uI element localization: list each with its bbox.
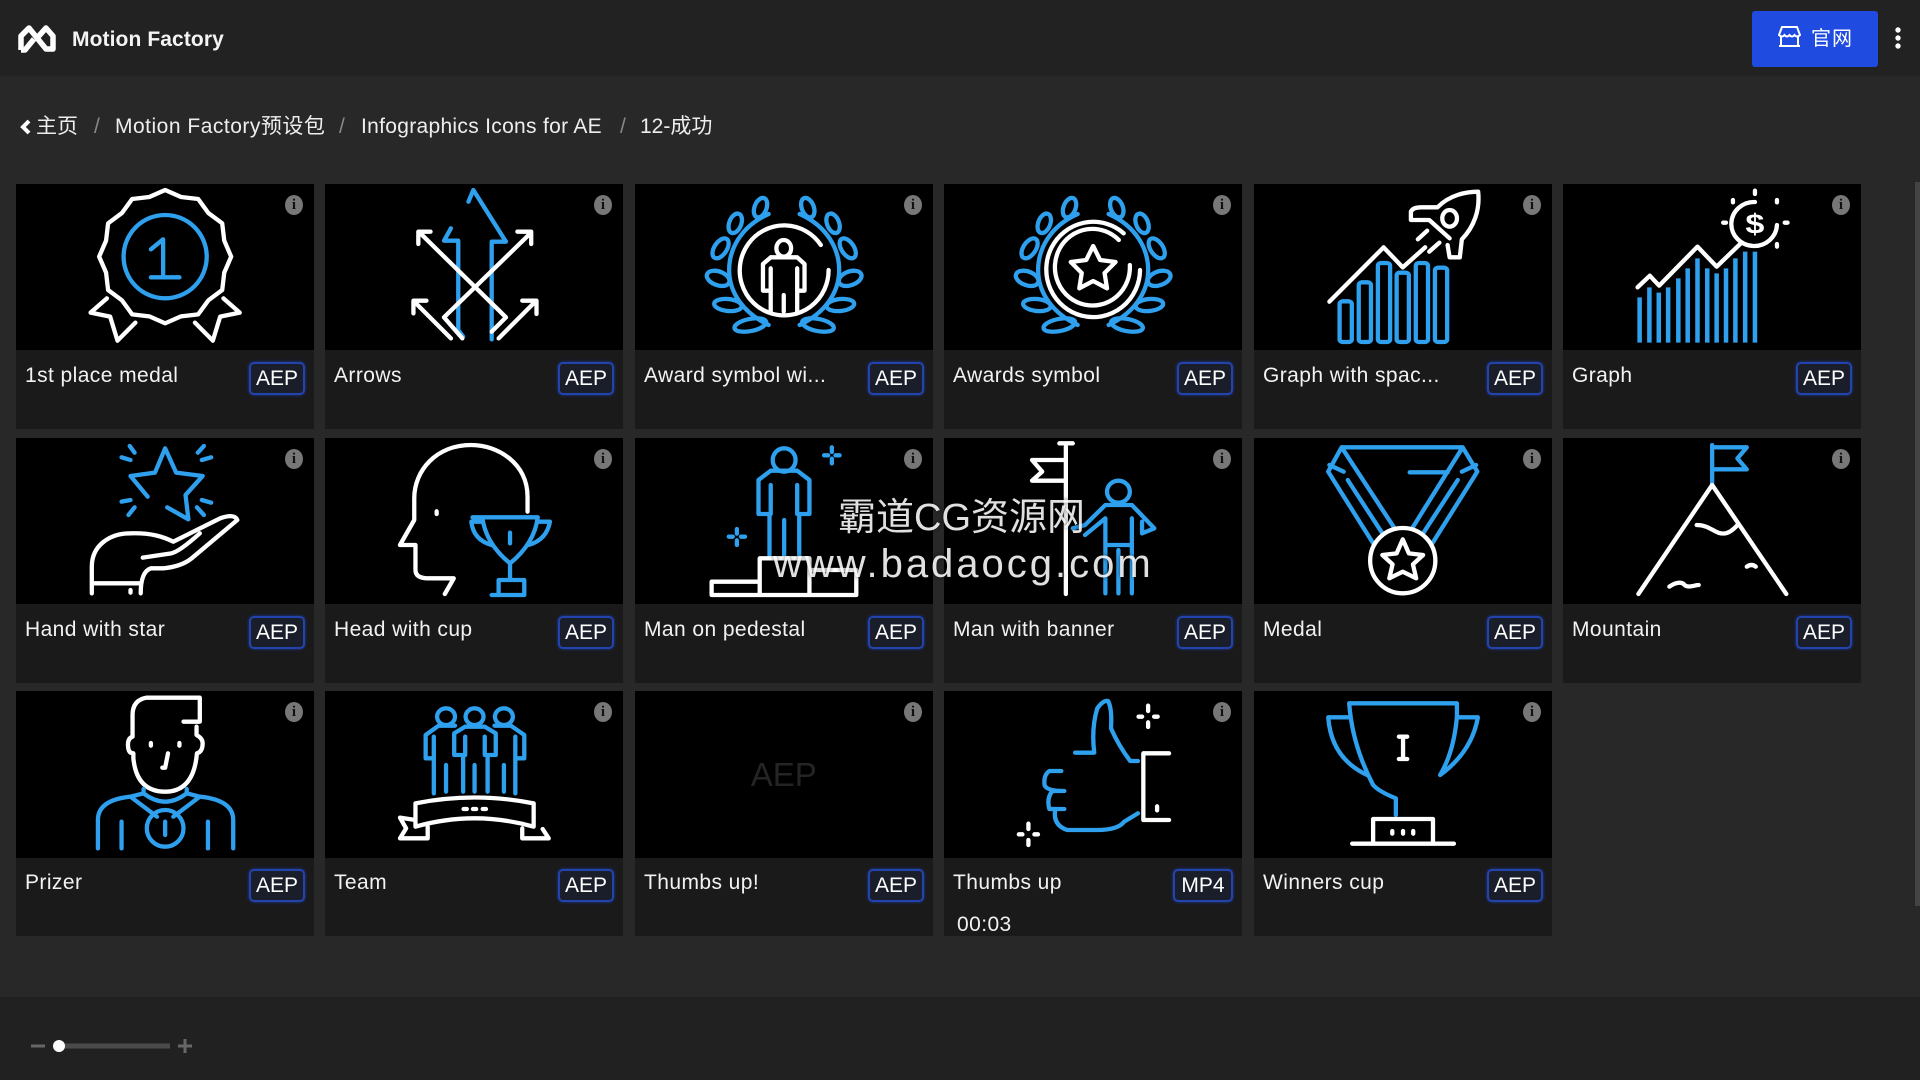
info icon <box>594 449 612 469</box>
format tag <box>1173 869 1233 902</box>
info icon <box>1523 449 1541 469</box>
info icon <box>1213 195 1231 215</box>
name: Team <box>334 871 387 894</box>
watermark: url: www.badaocg.com <box>773 542 1154 586</box>
format tag <box>1487 362 1543 395</box>
panel: 1st place medal card <box>16 184 314 429</box>
format tag: AEP <box>1494 367 1536 390</box>
panel: thumbs up card <box>944 691 1242 936</box>
crumb separators <box>94 115 626 138</box>
info icon <box>594 195 612 215</box>
icon: team <box>325 691 622 858</box>
brand name: Motion Factory <box>72 28 224 51</box>
icon: awards symbol <box>944 184 1242 350</box>
info icon: i <box>1839 197 1843 213</box>
format tag <box>868 616 924 649</box>
name: Mountain <box>1572 618 1662 641</box>
icon: mountain <box>1563 438 1860 604</box>
format tag <box>249 362 305 395</box>
menu dots <box>1895 27 1901 49</box>
info icon: i <box>292 197 296 213</box>
icon: winners cup <box>1254 691 1552 858</box>
icon: award symbol with man <box>635 184 932 350</box>
panel: prizer card <box>16 691 314 936</box>
breadcrumb <box>20 115 712 138</box>
format tag: AEP <box>565 621 607 644</box>
watermark <box>770 496 1154 586</box>
format tag: AEP <box>875 874 917 897</box>
name: Prizer <box>25 871 82 894</box>
format tag <box>1487 869 1543 902</box>
name: Thumbs up <box>953 871 1062 894</box>
panel: arrows card <box>325 184 622 429</box>
info icon: i <box>1530 451 1534 467</box>
crumb: home: 主页 <box>36 115 78 138</box>
info icon <box>285 702 303 722</box>
button label: 官网 <box>1811 28 1853 50</box>
name: Arrows <box>334 364 402 387</box>
panel: medal card <box>1254 438 1552 683</box>
back chevron <box>20 120 30 134</box>
format tag <box>558 616 614 649</box>
format tag: AEP <box>875 621 917 644</box>
format tag <box>1177 616 1233 649</box>
panel: hand with star card <box>16 438 314 683</box>
name: Winners cup <box>1263 871 1384 894</box>
crumb separators: / <box>620 115 626 138</box>
zoom slider <box>31 1039 192 1053</box>
format tag <box>558 362 614 395</box>
format tag: AEP <box>1494 621 1536 644</box>
icon: man on pedestal <box>635 438 932 604</box>
panel: award symbol card <box>635 184 932 429</box>
info icon <box>1213 702 1231 722</box>
icon: 1st place medal <box>16 184 314 350</box>
info icon: i <box>1530 197 1534 213</box>
format tag: AEP <box>256 367 298 390</box>
panel: winners cup card <box>1254 691 1552 936</box>
info icon: i <box>1530 704 1534 720</box>
format tag: MP4 <box>1181 874 1225 897</box>
crumb separators: / <box>94 115 100 138</box>
footer with zoom slider <box>0 997 1920 1080</box>
panel: graph card <box>1563 184 1860 429</box>
watermark: site name: 霸道CG资源网 <box>838 497 1085 539</box>
icon: Motion Factory logo <box>18 25 56 53</box>
format tag: AEP <box>1494 874 1536 897</box>
format tag <box>868 362 924 395</box>
info icon: i <box>1220 197 1224 213</box>
info icon: i <box>292 704 296 720</box>
info icon <box>904 449 922 469</box>
info icon: i <box>601 451 605 467</box>
info icon <box>285 195 303 215</box>
name: Graph <box>1572 364 1632 387</box>
name: Man with banner <box>953 618 1115 641</box>
format tag <box>1796 616 1852 649</box>
crumb: infographics icons: Infographics Icons for AE <box>361 115 602 138</box>
name: Head with cup <box>334 618 473 641</box>
format tag: AEP <box>1184 621 1226 644</box>
panel: awards symbol card <box>944 184 1242 429</box>
format tag: AEP <box>256 874 298 897</box>
format tag: AEP <box>1803 367 1845 390</box>
icon: arrows <box>325 184 622 350</box>
format tag: AEP <box>875 367 917 390</box>
name: Hand with star <box>25 618 165 641</box>
icon: hand with star <box>16 438 314 604</box>
name: Awards symbol <box>953 364 1100 387</box>
crumb separators: / <box>339 115 345 138</box>
duration: 00:03 <box>957 913 1012 936</box>
format tag <box>249 616 305 649</box>
icon: medal <box>1254 438 1552 604</box>
info icon <box>1523 702 1541 722</box>
icon: graph with rocket <box>1254 184 1552 350</box>
info icon: i <box>1220 704 1224 720</box>
info icon <box>904 702 922 722</box>
format tag <box>1177 362 1233 395</box>
name: Graph with spac... <box>1263 364 1440 387</box>
name: Man on pedestal <box>644 618 806 641</box>
info icon: i <box>911 197 915 213</box>
format tag: AEP <box>565 874 607 897</box>
info icon: i <box>292 451 296 467</box>
panel: thumbs up! card <box>635 691 932 936</box>
panel: man with banner card <box>944 438 1242 683</box>
icon: graph with dollar: $ <box>1745 208 1764 240</box>
format tag <box>249 869 305 902</box>
format tag: AEP <box>256 621 298 644</box>
format tag <box>1487 616 1543 649</box>
header bar <box>0 0 1920 76</box>
info icon <box>285 449 303 469</box>
thumbnail placeholder: AEP <box>751 756 817 793</box>
info icon <box>904 195 922 215</box>
format tag: AEP <box>565 367 607 390</box>
info icon: i <box>601 197 605 213</box>
icon: thumbs up <box>944 691 1242 858</box>
thumbnail placeholder <box>635 691 932 858</box>
info icon: i <box>911 704 915 720</box>
info icon <box>1832 449 1850 469</box>
info icon <box>1832 195 1850 215</box>
scrollbar <box>1915 182 1920 906</box>
info icon <box>1523 195 1541 215</box>
name: Award symbol wi... <box>644 364 826 387</box>
icon: prizer <box>16 691 314 858</box>
button: official site <box>1752 11 1878 67</box>
icon: man with banner <box>944 438 1242 604</box>
icon: graph with dollar <box>1563 184 1860 350</box>
panel: mountain card <box>1563 438 1860 683</box>
panel: man on pedestal card <box>635 438 932 683</box>
info icon: i <box>911 451 915 467</box>
panel: team card <box>325 691 622 936</box>
name: 1st place medal <box>25 364 178 387</box>
crumb: current page: 12-成功 <box>640 115 712 138</box>
format tag <box>868 869 924 902</box>
info icon: i <box>1839 451 1843 467</box>
info icon <box>594 702 612 722</box>
panel: graph with spaceship card <box>1254 184 1552 429</box>
format tag <box>1796 362 1852 395</box>
crumb: preset pack: Motion Factory预设包 <box>115 115 325 138</box>
info icon: i <box>601 704 605 720</box>
format tag: AEP <box>1803 621 1845 644</box>
icon: head with cup <box>325 438 622 604</box>
name: Thumbs up! <box>644 871 759 894</box>
panel: head with cup card <box>325 438 622 683</box>
format tag: AEP <box>1184 367 1226 390</box>
icon: store <box>1778 26 1801 47</box>
info icon <box>1213 449 1231 469</box>
info icon: i <box>1220 451 1224 467</box>
format tag <box>558 869 614 902</box>
name: Medal <box>1263 618 1322 641</box>
